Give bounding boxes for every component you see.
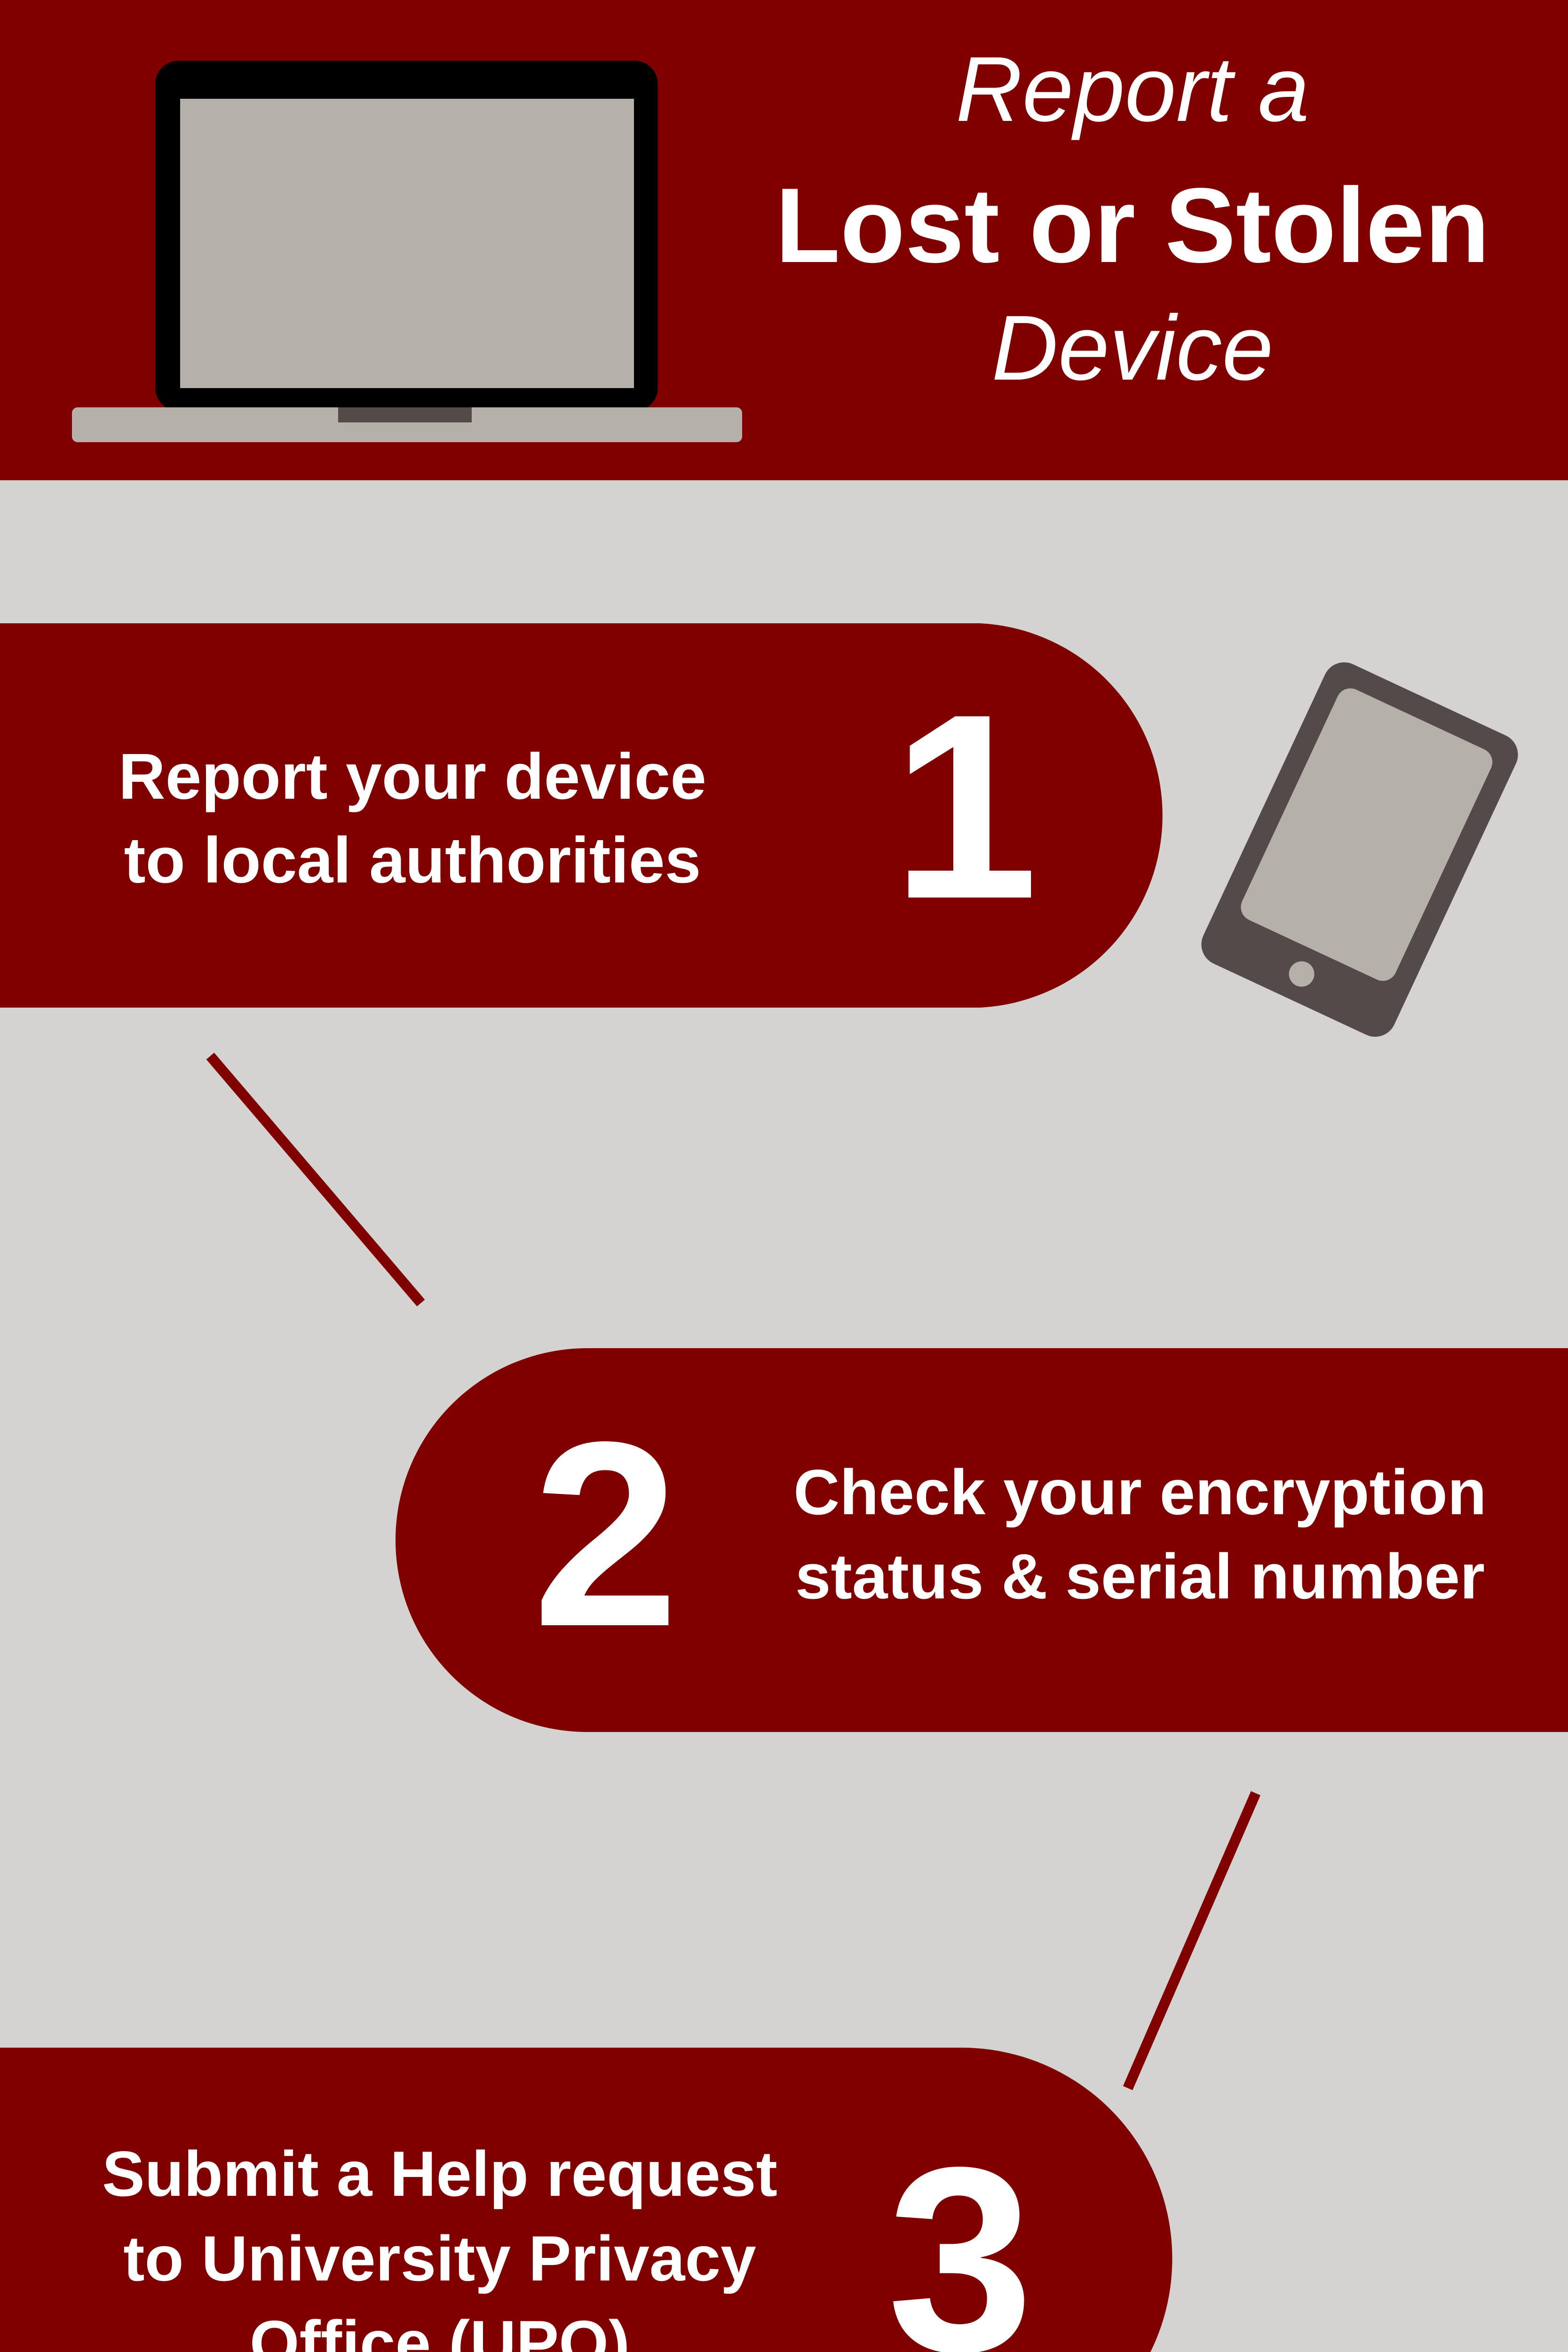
text: step 3: Submit a Help request [102,2138,777,2209]
header banner [0,0,1568,480]
text: step 2 [793,1456,1487,1612]
title: Device [991,296,1274,399]
text: step 2: status & serial number [795,1541,1485,1612]
text: step 1: to local authorities [124,824,701,897]
icon: laptop [72,61,742,442]
title [775,38,1490,399]
text: step 2: Check your encryption [793,1456,1487,1528]
text: step 1 [119,740,706,897]
text: step 1: Report your device [119,740,706,813]
arrow: connector 2 to 3 [1128,1793,1256,2088]
number 2: 2 [532,1387,679,1681]
panel: step 2 [396,1348,1568,1732]
number 1: 1 [892,659,1038,954]
title: Report a [956,38,1309,141]
title: Lost or Stolen [775,166,1490,285]
icon: phone [1195,655,1525,1044]
text: step 3 [102,2138,777,2352]
text: step 3: to University Privacy [123,2223,756,2294]
panel: step 3 [0,2048,1172,2352]
panel: step 1 [0,623,1163,1008]
arrow: connector 1 to 2 [210,1056,421,1303]
